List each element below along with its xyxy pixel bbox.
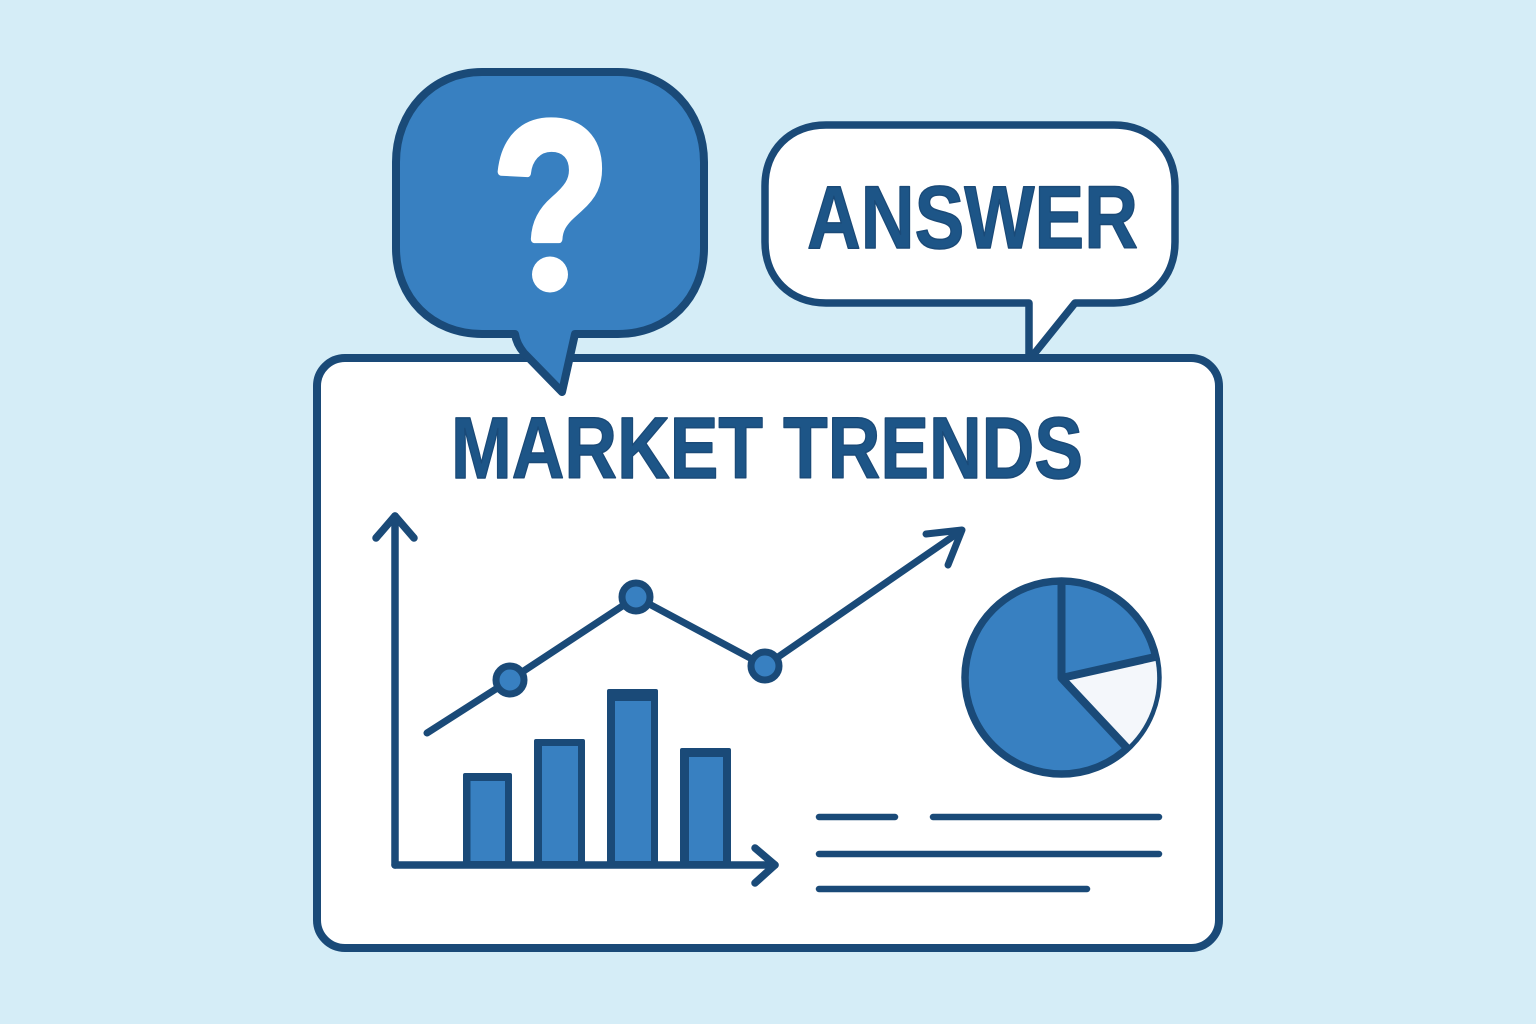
question mark: ?: [492, 72, 610, 340]
speech bubble: question: [396, 72, 704, 392]
chart: axes: [376, 516, 775, 883]
bar 4: [680, 748, 731, 865]
pie white slice: [1062, 658, 1157, 746]
text placeholder lines: [819, 817, 1159, 889]
answer label: ANSWER: [807, 167, 1138, 267]
question mark: [498, 117, 602, 292]
speech bubble: answer: [765, 125, 1175, 354]
chart: trend line with arrow: [427, 530, 962, 733]
data point 1: [496, 666, 524, 694]
data point 2: [622, 583, 650, 611]
chart: bars: [463, 689, 731, 865]
bar 3: [607, 689, 658, 865]
data point 3: [751, 652, 779, 680]
pie chart: [965, 581, 1158, 774]
arrow head: [926, 530, 962, 565]
bar 1: [463, 773, 512, 865]
title: MARKET TRENDS: [451, 400, 1083, 497]
bar 2: [534, 739, 585, 865]
